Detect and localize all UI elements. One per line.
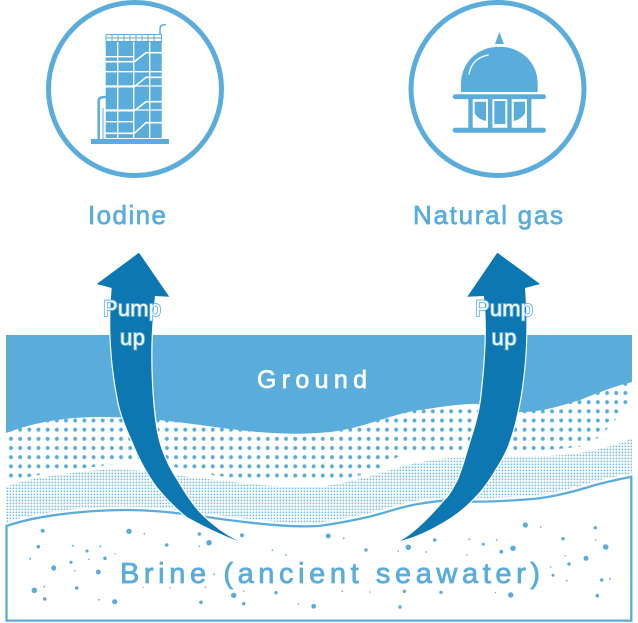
coarse dotted layer — [6, 380, 632, 484]
brine particles — [29, 522, 611, 609]
arrow: right pump up — [400, 253, 540, 541]
arrow label: left pump up — [103, 296, 161, 350]
arrow label: right pump up — [475, 296, 533, 350]
icon: natural gas tank — [411, 2, 584, 176]
arrow: left pump up — [97, 253, 238, 541]
label: iodine: Iodine — [88, 200, 166, 230]
arrow label: right pump up: up — [492, 325, 516, 350]
arrow label: left pump up: up — [120, 325, 145, 350]
arrow label: right pump up: Pump — [475, 296, 533, 321]
panel: brine layer — [6, 477, 631, 621]
label: ground: Ground — [257, 366, 367, 394]
label: brine: Brine (ancient seawater) — [120, 558, 540, 590]
arrow label: left pump up: Pump — [103, 296, 161, 321]
icon: iodine plant — [48, 2, 222, 176]
fine dotted layer — [6, 438, 632, 535]
label: natural gas: Natural gas — [413, 200, 563, 230]
panel: ground layer — [6, 335, 632, 434]
